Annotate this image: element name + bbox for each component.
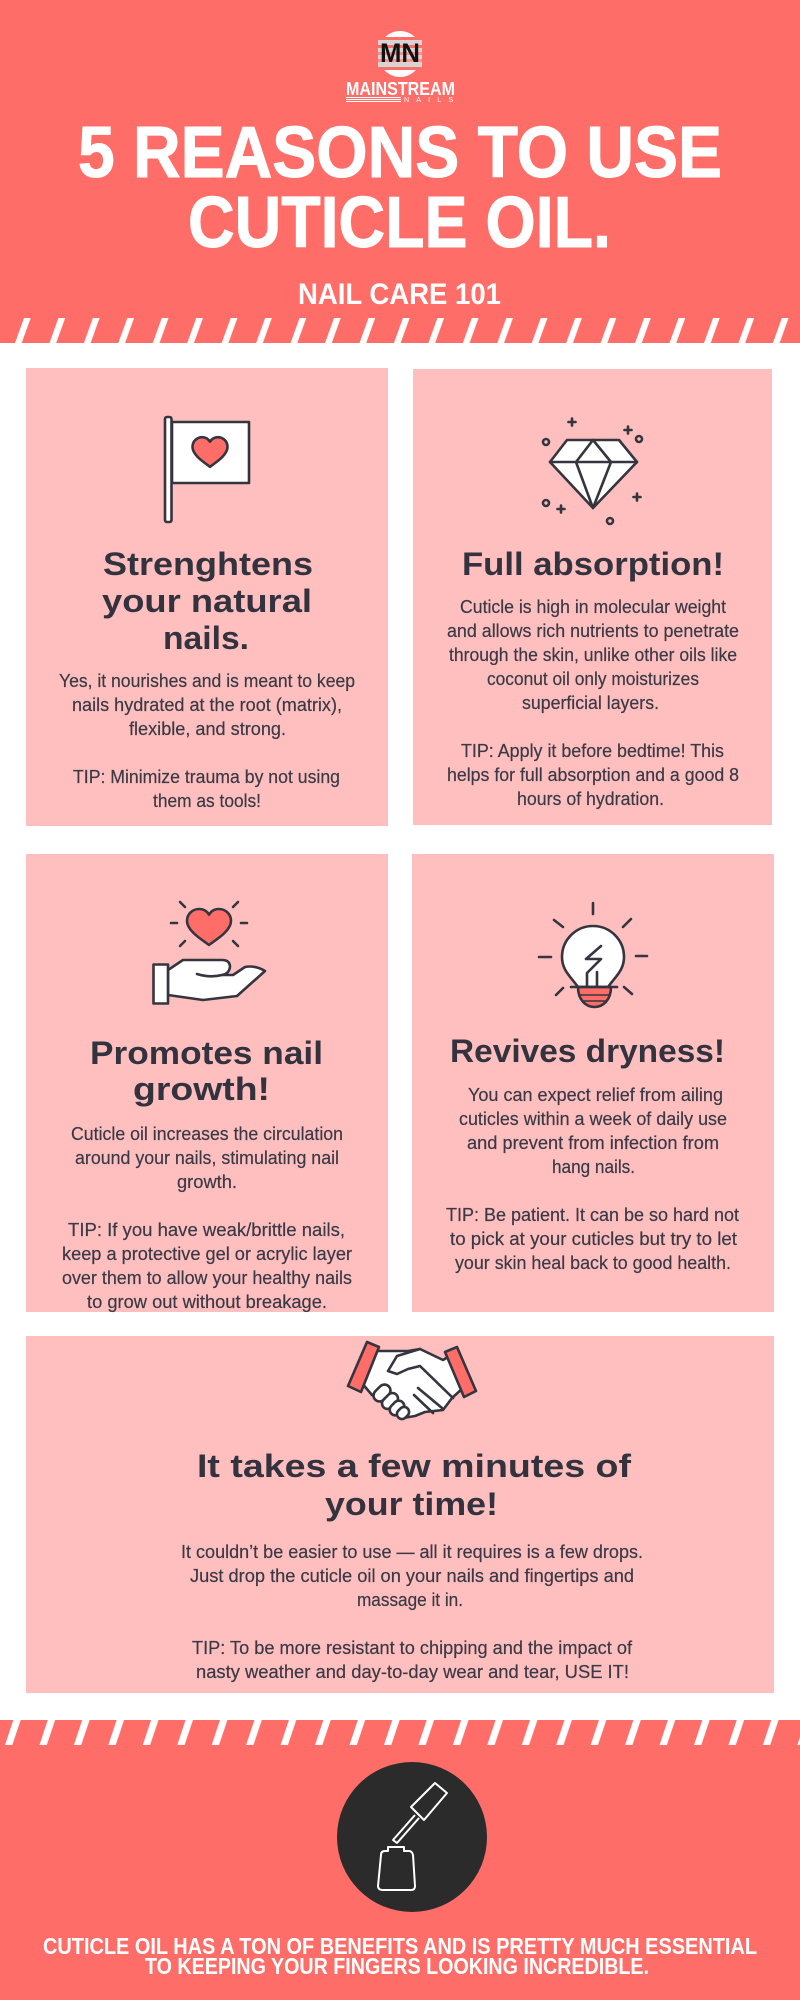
body text: Yes, it nourishes and is meant to keep [59, 671, 355, 691]
logo: Mainstream Nails: MN [380, 38, 420, 68]
body text: hang nails. [552, 1157, 635, 1177]
heading: growth! [133, 1071, 270, 1107]
body text: to grow out without breakage. [87, 1292, 327, 1312]
body text: and prevent from infection from [467, 1133, 719, 1153]
heading: your time! [325, 1486, 498, 1522]
body text: coconut oil only moisturizes [487, 669, 699, 689]
body text: Cuticle is high in molecular weight [460, 597, 726, 617]
body text: nails hydrated at the root (matrix), [72, 695, 342, 715]
body text: them as tools! [153, 791, 261, 811]
body text [62, 1124, 352, 1312]
title: CUTICLE OIL. [188, 183, 611, 263]
body text: TIP: If you have weak/brittle nails, [68, 1220, 345, 1240]
heading [102, 546, 313, 656]
logo: Mainstream Nails: MAINSTREAM [346, 78, 455, 99]
heading [90, 1035, 323, 1107]
heading: Promotes nail [90, 1035, 323, 1071]
body text [447, 597, 739, 809]
body text: flexible, and strong. [129, 719, 286, 739]
heading: Strenghtens [103, 546, 313, 582]
icon: light bulb [539, 903, 647, 1007]
logo: Mainstream Nails [346, 31, 455, 104]
body text: hours of hydration. [517, 789, 664, 809]
body text [59, 671, 355, 811]
body text: TIP: Minimize trauma by not using [73, 767, 340, 787]
body text: growth. [177, 1172, 237, 1192]
heading: nails. [163, 620, 249, 656]
header banner [0, 0, 800, 343]
body text: to pick at your cuticles but try to let [450, 1229, 737, 1249]
body text: superficial layers. [522, 693, 659, 713]
panel: revives dryness [412, 854, 774, 1312]
panel: it takes a few minutes [26, 1336, 774, 1693]
closing statement [43, 1933, 757, 1979]
body text: keep a protective gel or acrylic layer [62, 1244, 352, 1264]
footer banner [0, 1720, 800, 2000]
body text: massage it in. [357, 1590, 463, 1610]
icon: diamond [543, 418, 642, 524]
heading: It takes a few minutes of [197, 1448, 631, 1484]
body text: TIP: Apply it before bedtime! This [461, 741, 724, 761]
icon: handshake [348, 1342, 476, 1421]
body text: TIP: To be more resistant to chipping and the impact of [192, 1638, 633, 1658]
body text: You can expect relief from ailing [468, 1085, 723, 1105]
heading: Revives dryness! [450, 1033, 725, 1069]
body text: cuticles within a week of daily use [459, 1109, 727, 1129]
icon: flag with heart [165, 417, 249, 522]
panel: full absorption [413, 369, 772, 825]
body text: nasty weather and day-to-day wear and tear, USE IT! [196, 1662, 629, 1682]
body text: Just drop the cuticle oil on your nails and fingertips and [190, 1566, 634, 1586]
body text: around your nails, stimulating nail [75, 1148, 339, 1168]
body text: Cuticle oil increases the circulation [71, 1124, 343, 1144]
body text: TIP: Be patient. It can be so hard not [446, 1205, 739, 1225]
icon: hand holding heart [154, 902, 265, 1004]
panel: promotes nail growth [26, 854, 388, 1312]
logo: Mainstream Nails: NAILS [404, 97, 453, 104]
body text [446, 1085, 739, 1273]
icon: nail polish bottle [337, 1762, 487, 1912]
body text: through the skin, unlike other oils like [449, 645, 737, 665]
closing statement: TO KEEPING YOUR FINGERS LOOKING INCREDIBLE. [145, 1953, 649, 1979]
body text: over them to allow your healthy nails [62, 1268, 352, 1288]
body text [181, 1542, 643, 1682]
heading: your natural [102, 583, 312, 619]
heading [197, 1448, 631, 1522]
heading: Full absorption! [462, 546, 724, 582]
body text: and allows rich nutrients to penetrate [447, 621, 739, 641]
body text: helps for full absorption and a good 8 [447, 765, 739, 785]
body text: It couldn’t be easier to use — all it requires is a few drops. [181, 1542, 643, 1562]
panel: strengthens your natural nails [26, 368, 388, 826]
title [78, 113, 722, 263]
title: 5 REASONS TO USE [78, 113, 722, 193]
subtitle: NAIL CARE 101 [298, 278, 501, 311]
body text: your skin heal back to good health. [455, 1253, 731, 1273]
